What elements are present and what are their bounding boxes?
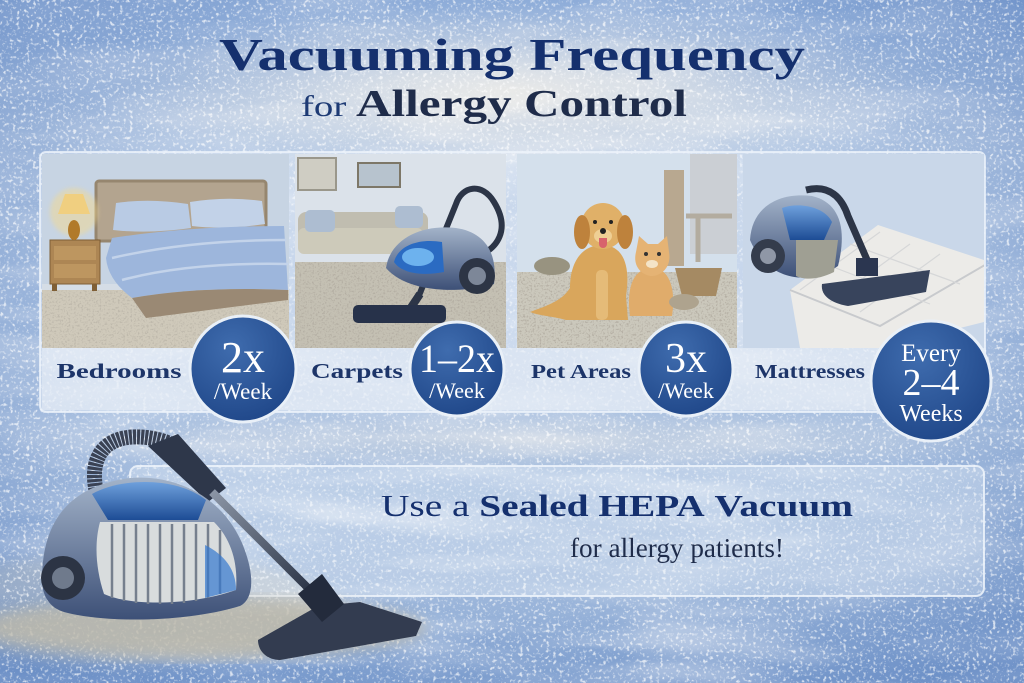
badge: 1-2x per week: 1–2x: [419, 336, 495, 381]
icon: duvet: [106, 226, 288, 298]
icon: mattress vacuum: [750, 189, 930, 306]
title line 2: for Allergy Control: [301, 83, 687, 125]
badge: 2x per week: 2x: [221, 333, 265, 382]
icon: cat: [629, 236, 673, 316]
panel: carpets image: [295, 154, 506, 348]
icon: canister body: [42, 478, 251, 620]
callout line 2: for allergy patients!: [570, 533, 784, 563]
label: Mattresses: Mattresses: [755, 361, 865, 383]
icon: golden retriever: [530, 203, 633, 320]
icon: small bowl: [669, 294, 699, 310]
panel: pet areas image: [517, 154, 737, 348]
badge: 2x per week: [190, 316, 296, 422]
icon: HEPA filter: [97, 522, 236, 603]
icon: wall pictures: [298, 158, 400, 190]
label: Carpets: Carpets: [311, 359, 403, 383]
callout line 1: Use a Sealed HEPA Vacuum: [381, 488, 853, 523]
badge: 2x per week: /Week: [214, 379, 273, 404]
icon: sofa: [298, 206, 428, 254]
dust pile: [0, 598, 425, 658]
icon: floor nozzle: [258, 602, 422, 660]
icon: wheel: [41, 556, 85, 600]
badge: every 2-4 weeks: Every: [901, 340, 961, 367]
badge: 1-2x per week: /Week: [429, 378, 485, 403]
icon: bed headboard: [96, 181, 266, 241]
label: Pet Areas: Pet Areas: [531, 361, 631, 383]
icon: scratching post: [664, 170, 684, 266]
badge: every 2-4 weeks: Weeks: [899, 401, 963, 427]
label: Bedrooms: Bedrooms: [56, 359, 182, 383]
icon: basket: [675, 268, 722, 296]
badge: 3x per week: /Week: [658, 378, 714, 403]
title: [219, 30, 806, 125]
panel: mattresses image: [743, 154, 990, 348]
badge: every 2-4 weeks: [871, 321, 991, 441]
panel: frequency card row: [40, 152, 991, 441]
icon: lamp: [50, 188, 98, 240]
icon: bed pillows: [113, 199, 265, 232]
icon: canister vacuum: [353, 189, 502, 323]
icon: hose: [94, 437, 192, 490]
badge: 3x per week: 3x: [665, 336, 707, 382]
icon: large HEPA vacuum: [0, 434, 425, 660]
icon: side table: [686, 216, 732, 262]
title line 1: Vacuuming Frequency: [219, 30, 806, 80]
icon: wand: [212, 492, 310, 590]
badge: 3x per week: [639, 322, 733, 416]
badge: every 2-4 weeks: 2–4: [902, 362, 960, 404]
icon: handle: [148, 434, 226, 502]
badge: 1-2x per week: [410, 322, 504, 416]
icon: bed frame: [132, 289, 288, 318]
icon: pet bowl: [534, 257, 570, 275]
label panel: text strip: [42, 348, 984, 410]
icon: mattress: [790, 225, 990, 348]
icon: nightstand: [50, 240, 100, 291]
panel: HEPA callout: [130, 466, 984, 596]
panel: bedrooms image: [42, 154, 289, 348]
